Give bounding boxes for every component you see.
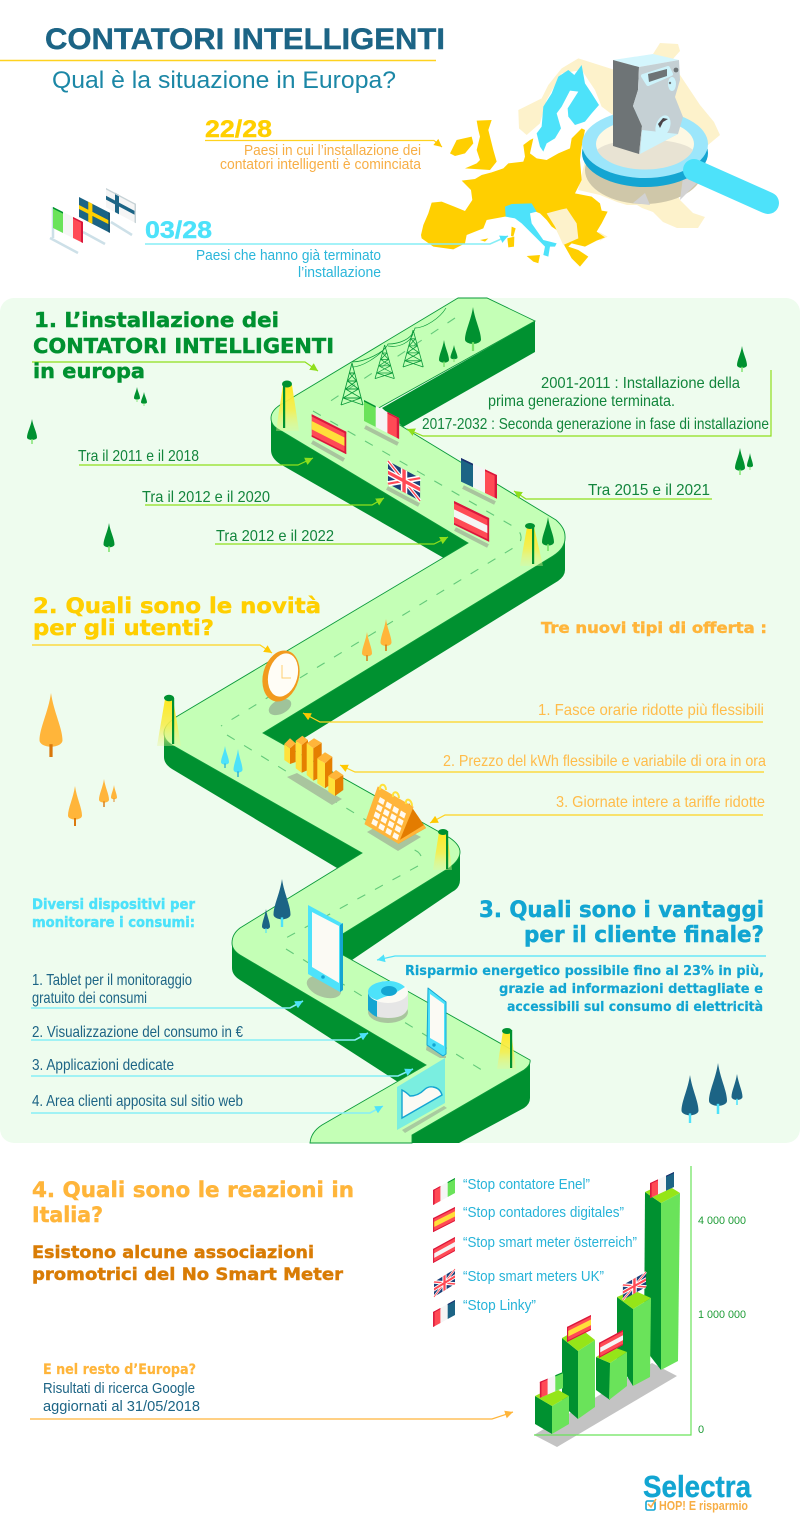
offer 1: [303, 702, 764, 722]
stat 03/28: Paesi che hanno già terminato: [196, 247, 381, 264]
legend: Italy: [433, 1176, 590, 1205]
country flags on road: [312, 400, 497, 546]
bar: Spain: [562, 1315, 595, 1419]
offer 2: 2. Prezzo del kWh flessibile e variabile di ora in ora: [443, 753, 766, 770]
orange trees: [40, 619, 392, 826]
device 4: 4. Area clienti apposita sul sitio web: [32, 1093, 243, 1110]
magnifier handle: [694, 170, 768, 203]
flag: France: [461, 458, 497, 503]
legend: France: [433, 1297, 536, 1327]
label: Austria dates: Tra 2012 e il 2022: [216, 528, 334, 545]
logo: Selectra: Selectra: [643, 1469, 752, 1504]
road center dashes: [221, 318, 521, 1072]
energy saving text: Risparmio energetico possibile fino al 23% in più,: [405, 964, 764, 979]
device 1: [31, 972, 303, 1008]
section 1 heading: [32, 308, 334, 383]
stat 03/28: 03/28: [145, 217, 212, 244]
device 3: 3. Applicazioni dedicate: [32, 1057, 174, 1074]
generation dates: [407, 370, 771, 436]
label: Austria dates: [215, 528, 448, 545]
winding road: [164, 298, 565, 1143]
flag: Italy: [364, 400, 399, 444]
icon: tablet: [304, 905, 344, 1003]
generation dates: 2001-2011 : Installazione della: [541, 375, 740, 392]
section 3 devices heading: monitorare i consumi:: [32, 915, 195, 931]
associations text: [32, 1243, 344, 1285]
section 4 heading: 4. Quali sono le reazioni in: [32, 1178, 354, 1202]
section 3 devices heading: Diversi dispositivi per: [32, 897, 195, 913]
section 1 heading: CONTATORI INTELLIGENTI: [33, 334, 334, 358]
map: finished countries Italy Sweden Finland: [505, 65, 599, 257]
section 2 heading: per gli utenti?: [33, 616, 214, 640]
cyan trees: [221, 746, 242, 777]
stat 22/28: [205, 116, 442, 173]
section 3 heading: 3. Quali sono i vantaggi: [479, 898, 764, 923]
label: France dates: [514, 482, 712, 499]
device 3: [31, 1057, 413, 1076]
road surface: [164, 298, 565, 1143]
map: countries not started: [504, 43, 720, 245]
green trees: [27, 307, 753, 552]
section 3 heading: per il cliente finale?: [524, 923, 764, 948]
flag: UK: [387, 461, 420, 505]
stat 22/28: Paesi in cui l’installazione dei: [244, 142, 421, 159]
bar: Italy: [535, 1372, 569, 1434]
energy saving text: accessibili sul consumo di elettricità: [507, 1000, 763, 1015]
section 4 heading: Italia?: [32, 1203, 103, 1227]
icon: smartphone: [426, 988, 446, 1058]
logo: Selectra: HOP! E risparmio: [659, 1498, 748, 1513]
flags of finished countries: [50, 188, 136, 253]
road side walls: [164, 321, 565, 1143]
associations text: promotrici del No Smart Meter: [32, 1265, 344, 1285]
electricity pylons: [341, 308, 446, 405]
smart meter: [613, 54, 683, 154]
offer 2: [340, 753, 766, 772]
legend: Spain: “Stop contadores digitales”: [463, 1204, 624, 1221]
axis labels: 0: [698, 1424, 704, 1436]
label: UK dates: [142, 489, 384, 506]
trees: [27, 307, 753, 1123]
icon: price bars: [284, 736, 343, 805]
magnifier shadow: [585, 136, 703, 204]
panel: road background: [0, 298, 800, 1143]
offer 3: [430, 794, 765, 823]
map of Europe with smart meter under magnifier: [421, 43, 768, 267]
section 2 heading: [32, 594, 321, 653]
legend: [433, 1176, 637, 1327]
stat 22/28: contatori intelligenti è cominciata: [220, 156, 422, 173]
rest of Europe note: [30, 1362, 513, 1419]
map: countries where installation started: [421, 120, 608, 267]
label: Spain dates: Tra il 2011 e il 2018: [78, 448, 199, 465]
legend: Spain: [433, 1204, 624, 1232]
icon: donut chart: [368, 981, 408, 1023]
associations text: Esistono alcune associazioni: [32, 1243, 314, 1263]
rest of Europe note: Risultati di ricerca Google: [43, 1381, 195, 1397]
stat 22/28: 22/28: [205, 116, 272, 143]
legend: Austria: “Stop smart meter österreich”: [463, 1234, 637, 1251]
subtitle: Qual è la situazione in Europa?: [52, 67, 396, 94]
navy trees: [262, 879, 742, 1123]
legend: UK: “Stop smart meters UK”: [463, 1268, 604, 1285]
title: CONTATORI INTELLIGENTI: [45, 23, 445, 56]
bar: France: [644, 1172, 680, 1370]
bar: UK: [617, 1272, 651, 1386]
rest of Europe note: aggiornati al 31/05/2018: [43, 1399, 200, 1415]
icon: calendar: [365, 785, 426, 851]
label: UK dates: Tra il 2012 e il 2020: [142, 489, 270, 506]
section 1 heading: 1. L’installazione dei: [34, 308, 279, 332]
generation dates: prima generazione terminata.: [488, 393, 675, 410]
label: Spain dates: [78, 448, 313, 465]
legend: Italy: “Stop contatore Enel”: [463, 1176, 590, 1193]
legend: France: “Stop Linky”: [463, 1297, 536, 1314]
legend: UK: [434, 1268, 604, 1297]
stat 03/28: [145, 217, 508, 281]
rest of Europe note: E nel resto d’Europa?: [43, 1362, 196, 1378]
flag: Austria: [454, 501, 489, 546]
energy saving text: [405, 964, 764, 1015]
device 2: 2. Visualizzazione del consumo in €: [32, 1024, 243, 1041]
axis labels: 1 000 000: [698, 1309, 746, 1321]
chart floor shadow: [534, 1363, 677, 1447]
bar: Austria: [596, 1330, 627, 1400]
energy saving text: grazie ad informazioni dettagliate e: [499, 982, 763, 997]
offers heading: Tre nuovi tipi di offerta :: [541, 619, 767, 637]
section 4 heading: [32, 1178, 354, 1227]
section 3 devices heading: [32, 897, 195, 931]
device 1: gratuito dei consumi: [32, 990, 147, 1007]
legend: Austria: [433, 1234, 637, 1263]
icon: clock: [257, 646, 305, 718]
magnifier ring: [582, 119, 708, 187]
bar chart: [534, 1166, 746, 1447]
icon: client area screen: [397, 1058, 447, 1133]
chart axes: [534, 1166, 691, 1435]
device 1: 1. Tablet per il monitoraggio: [32, 972, 192, 989]
axis labels: 4 000 000: [698, 1215, 746, 1227]
offer 1: 1. Fasce orarie ridotte più flessibili: [538, 702, 764, 719]
section 2 heading: 2. Quali sono le novità: [33, 594, 321, 618]
section 1 heading: in europa: [33, 359, 145, 383]
axis labels: [698, 1215, 746, 1436]
icon: checkbox: [646, 1499, 656, 1510]
offer 3: 3. Giornate intere a tariffe ridotte: [556, 794, 765, 811]
stat 03/28: l’installazione: [298, 264, 381, 281]
street lamps: [157, 380, 543, 1069]
section 3 heading: [377, 898, 766, 960]
flag: Spain: [312, 414, 346, 460]
device 4: [31, 1093, 383, 1113]
label: France dates: Tra 2015 e il 2021: [588, 482, 710, 499]
